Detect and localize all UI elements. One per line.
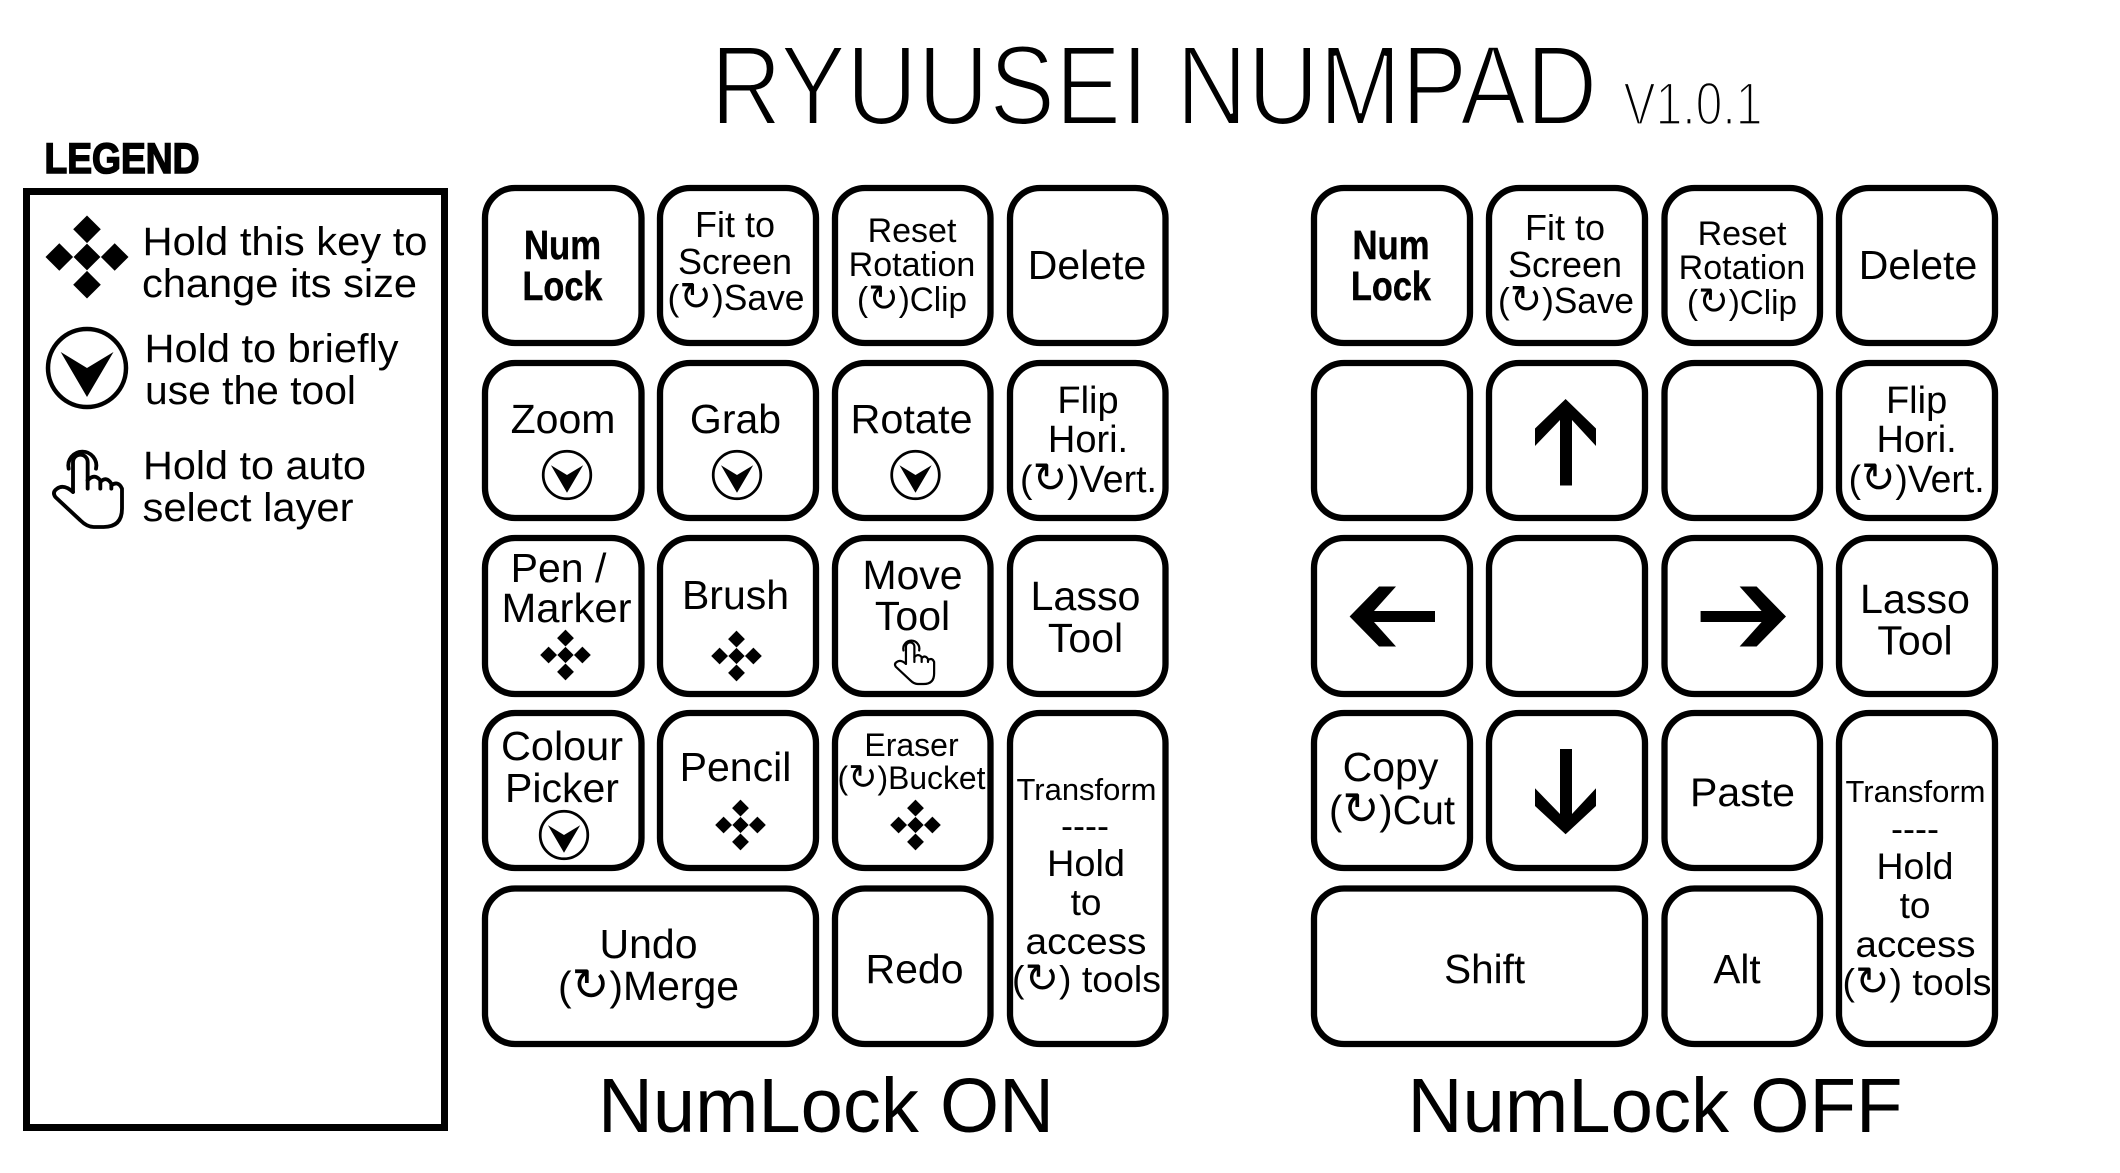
key: Zoom: Zoom	[511, 396, 615, 442]
legend icon: change size diamonds	[46, 216, 128, 298]
legend text: brief use: Hold to briefly	[144, 327, 398, 371]
key: Flip: Flip	[1057, 380, 1119, 422]
key: Transform: Hold	[1876, 846, 1954, 887]
key: Rotate: Rotate	[850, 396, 972, 442]
key: Num Lock	[485, 188, 642, 343]
key: Delete: Delete	[1028, 242, 1146, 288]
heading: NumLock ON: NumLock ON	[598, 1063, 1054, 1149]
key: Fit to Screen: Screen	[1508, 244, 1622, 285]
key: Flip: (↻)Vert.	[1849, 453, 1985, 502]
key: Transform: to	[1071, 882, 1101, 923]
key: blank	[1489, 538, 1645, 694]
key: Grab	[660, 363, 816, 518]
legend text: change size: change its size	[142, 262, 417, 306]
key: Zoom	[485, 363, 642, 518]
key: Reset Rotation: Reset	[868, 212, 957, 250]
panel: NumLock ON keypad	[485, 188, 1166, 1044]
key: Brush: Brush	[682, 572, 789, 618]
key: Reset Rotation: (↻)Clip	[1687, 279, 1797, 323]
key: Copy / Cut	[1314, 713, 1470, 868]
key: Transform	[1839, 713, 1995, 1044]
key: Lasso Tool	[1839, 538, 1995, 694]
key: Flip: Hori.	[1048, 419, 1128, 461]
key: Transform	[1010, 713, 1166, 1044]
version number: V1.0.1	[1624, 70, 1762, 138]
key: Delete: Delete	[1859, 242, 1977, 288]
title: RYUUSEI NUMPAD	[710, 22, 1598, 148]
key: Transform: (↻) tools	[1012, 954, 1161, 1002]
key: up arrow	[1489, 363, 1645, 518]
key: Reset Rotation: Rotation	[1679, 249, 1805, 287]
key: Lasso Tool: Lasso	[1860, 576, 1970, 622]
key: Lasso Tool: Tool	[1877, 618, 1953, 664]
key: Paste	[1664, 713, 1820, 868]
key: Lasso Tool: Lasso	[1030, 573, 1140, 619]
key: Pen / Marker: Marker	[502, 585, 632, 631]
key: Copy / Cut: Copy	[1343, 744, 1439, 790]
key: Undo: (↻)Merge	[558, 958, 739, 1011]
key: blank	[1664, 363, 1820, 518]
key: Transform: to	[1900, 885, 1930, 926]
legend text: change size	[142, 220, 428, 306]
panel: legend	[26, 192, 444, 1128]
key: Shift: Shift	[1444, 946, 1525, 992]
key: Transform: access	[1856, 924, 1976, 965]
key: Num Lock: Num	[1352, 222, 1430, 268]
key: Move Tool: Tool	[875, 593, 950, 639]
key: Transform: Transform	[1016, 773, 1156, 807]
key: Flip: (↻)Vert.	[1020, 453, 1157, 502]
key: Lasso Tool: Tool	[1048, 615, 1123, 661]
key: Move Tool: Move	[862, 552, 962, 598]
key: blank	[1314, 363, 1470, 518]
key: Pencil: Pencil	[680, 744, 791, 790]
key: Alt	[1664, 888, 1820, 1044]
legend heading: LEGEND	[44, 135, 200, 183]
key: Fit to Screen	[660, 188, 816, 343]
key: Fit to Screen: Fit to	[1525, 207, 1605, 248]
key: Delete	[1839, 188, 1995, 343]
key: Undo: Undo	[599, 921, 698, 967]
key: Num Lock: Num	[524, 222, 601, 268]
panel: NumLock OFF keypad	[1314, 188, 1995, 1044]
key: Transform: Hold	[1047, 843, 1125, 884]
key: down arrow	[1489, 713, 1645, 868]
legend text: brief use	[144, 327, 398, 413]
key: Num Lock: Lock	[1351, 263, 1431, 309]
key: Brush	[660, 538, 816, 694]
legend icon: brief use	[48, 329, 126, 407]
heading: NumLock OFF: NumLock OFF	[1408, 1063, 1902, 1149]
key: Transform: ----	[1891, 808, 1939, 849]
key: Colour Picker: Picker	[505, 765, 619, 811]
key: Paste: Paste	[1690, 771, 1795, 815]
key: Transform: Transform	[1846, 775, 1986, 809]
key: Reset Rotation: (↻)Clip	[857, 276, 967, 320]
legend text: change size: Hold this key to	[142, 220, 428, 264]
key: Reset Rotation	[835, 188, 990, 343]
key: Transform: access	[1026, 921, 1146, 962]
legend text: brief use: use the tool	[145, 369, 356, 413]
key: Flip: Flip	[1886, 380, 1947, 422]
key: Fit to Screen: (↻)Save	[1498, 277, 1634, 323]
key: Reset Rotation	[1664, 188, 1820, 343]
key: Flip	[1839, 363, 1995, 518]
key: Fit to Screen: Fit to	[695, 204, 775, 245]
key: right arrow	[1664, 538, 1820, 694]
key: Redo: Redo	[865, 946, 964, 992]
key: Grab: Grab	[690, 396, 781, 442]
key: Colour Picker: Colour	[501, 723, 623, 769]
key: Fit to Screen: (↻)Save	[668, 274, 804, 320]
key: Alt: Alt	[1713, 946, 1761, 992]
key: Shift	[1314, 888, 1645, 1044]
key: Flip	[1010, 363, 1166, 518]
key: Reset Rotation: Reset	[1698, 215, 1787, 253]
key: Transform: ----	[1061, 805, 1109, 846]
key: Num Lock: Lock	[522, 263, 603, 309]
key: Delete	[1010, 188, 1166, 343]
key: Redo	[835, 888, 990, 1044]
key: Transform: (↻) tools	[1842, 957, 1992, 1005]
key: Move Tool	[835, 538, 990, 694]
key: Undo	[485, 888, 816, 1044]
legend text: auto select: select layer	[142, 486, 354, 530]
key: Rotate	[835, 363, 990, 518]
key: Copy / Cut: (↻)Cut	[1329, 782, 1456, 835]
key: Pen / Marker: Pen /	[511, 545, 607, 591]
legend icon: auto select hand	[54, 452, 122, 527]
key: left arrow	[1314, 538, 1470, 694]
key: Fit to Screen	[1489, 188, 1645, 343]
key: Flip: Hori.	[1876, 419, 1957, 461]
key: Pencil	[660, 713, 816, 868]
key: Eraser: Eraser	[864, 727, 959, 763]
key: Fit to Screen: Screen	[678, 241, 792, 282]
key: Lasso Tool	[1010, 538, 1166, 694]
key: Reset Rotation: Rotation	[849, 246, 975, 284]
key: Eraser	[835, 713, 990, 868]
legend text: auto select: Hold to auto	[143, 444, 366, 488]
legend text: auto select	[142, 444, 366, 530]
key: Pen / Marker	[485, 538, 642, 694]
key: Eraser: (↻)Bucket	[838, 757, 986, 798]
key: Num Lock	[1314, 188, 1470, 343]
key: Colour Picker	[485, 713, 642, 868]
